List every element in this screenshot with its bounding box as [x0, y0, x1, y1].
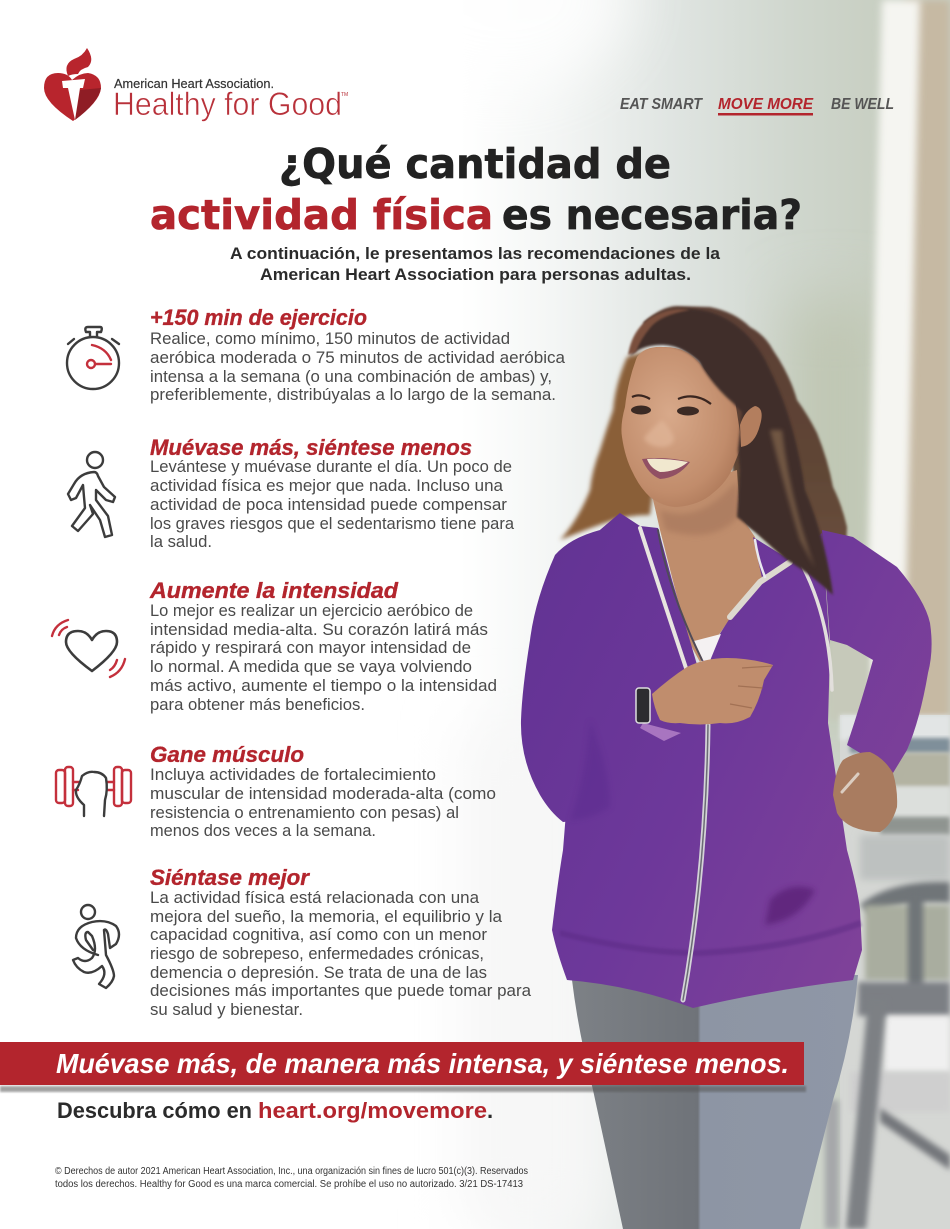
neck and chest [652, 470, 764, 662]
body text: mejora del sueño, la memoria, el equilibrio y la [150, 908, 503, 926]
body text: más activo, aumente el tiempo o la intensidad [150, 677, 497, 695]
body text: Incluya actividades de fortalecimiento [150, 766, 436, 784]
fitness tracker [636, 688, 650, 723]
hoodie hem shading [560, 920, 862, 956]
woman jogging [521, 306, 932, 1229]
copyright: todos los derechos. Healthy for Good es una marca comercial. Se prohíbe el uso no autorizado. 3/21 DS-17413 [55, 1179, 523, 1190]
neck shadow [660, 480, 740, 535]
call to action [57, 1098, 493, 1123]
body text [150, 889, 532, 1019]
body text: Levántese y muévase durante el día. Un poco de [150, 458, 512, 476]
title [150, 140, 802, 239]
banner: Muévase más, de manera más intensa, y siéntese menos. [56, 1048, 789, 1079]
copyright: © Derechos de autor 2021 American Heart Association, Inc., una organización sin fines de lucro 501(c)(3). Reservados [55, 1166, 528, 1177]
left hand finger lines [730, 666, 772, 708]
body text: los graves riesgos que el sedentarismo tiene para [150, 515, 515, 533]
ear [740, 406, 762, 447]
hair back, orange-brown left side [560, 350, 660, 540]
body text [150, 330, 566, 404]
body text: decisiones más importantes que puede tomar para [150, 982, 532, 1000]
call to action: Descubra cómo en [57, 1098, 252, 1123]
icon: hand with dumbbell [56, 767, 131, 816]
copyright [55, 1166, 528, 1190]
heading: Aumente la intensidad [149, 578, 399, 603]
body text [150, 766, 496, 840]
call to action: . [487, 1098, 493, 1123]
subtitle [230, 245, 721, 284]
body text: actividad física es mejor que nada. Incluso una [150, 477, 504, 495]
logo: American Heart Association Healthy for Good: Healthy for Good [113, 86, 342, 122]
panel: build muscle [56, 742, 496, 840]
body text [150, 458, 515, 551]
hoodie left sleeve [521, 513, 665, 822]
icon: walking person [68, 452, 115, 537]
hoodie right sleeve [822, 530, 932, 773]
body text: rápido y respirará con mayor intensidad de [150, 639, 471, 657]
navigation [620, 96, 894, 116]
panel: increase intensity [52, 578, 497, 714]
body text: La actividad física está relacionada con una [150, 889, 480, 907]
navigation: EAT SMART [620, 96, 703, 113]
left hand [652, 658, 773, 724]
wordmark: American Heart Association. [114, 76, 274, 91]
wristband [640, 723, 681, 741]
hair lighter streaks [770, 430, 815, 568]
subtitle: American Heart Association para personas adultas. [260, 266, 691, 284]
body text: intensa a la semana (o una combinación de ambas) y, [150, 368, 552, 386]
banner [0, 1042, 806, 1092]
title: ¿Qué cantidad de [279, 140, 671, 188]
body text: para obtener más beneficios. [150, 696, 365, 714]
body text: resistencia o entrenamiento con pesas) al [150, 804, 459, 822]
hair back, right side [643, 306, 847, 600]
body text: riesgo de sobrepeso, enfermedades crónicas, [150, 945, 484, 963]
icon: beating heart [52, 620, 125, 677]
leggings [572, 975, 858, 1229]
icon: stopwatch [67, 327, 119, 389]
title: es necesaria? [502, 191, 802, 239]
white shirt [694, 634, 721, 668]
body text: capacidad cognitiva, así como con un menor [150, 926, 488, 944]
logo: American Heart Association Healthy for Good: TM [341, 92, 348, 98]
heading: Gane músculo [150, 742, 304, 767]
navigation: BE WELL [831, 96, 894, 113]
body text: demencia o depresión. Se trata de una de las [150, 964, 487, 982]
body text: su salud y bienestar. [150, 1001, 303, 1019]
right hand [833, 752, 897, 832]
body text: lo normal. A medida que se vaya volviendo [150, 658, 472, 676]
hoodie pocket shading [765, 887, 815, 925]
icon: running person [73, 905, 119, 988]
logo: American Heart Association Healthy for Good [44, 48, 348, 122]
right hand highlight [842, 774, 858, 792]
panel: move more sit less [68, 435, 515, 551]
call to action: heart.org/movemore [258, 1098, 487, 1123]
body text: la salud. [150, 533, 212, 551]
body text: muscular de intensidad moderada-alta (como [150, 785, 496, 803]
face features [631, 395, 711, 479]
heading: +150 min de ejercicio [150, 305, 367, 330]
body text [150, 602, 497, 714]
heading: Muévase más, siéntese menos [150, 435, 472, 460]
body text: intensidad media-alta. Su corazón latirá más [150, 621, 488, 639]
panel: 150 minutes [67, 305, 566, 404]
body text: Lo mejor es realizar un ejercicio aeróbico de [150, 602, 473, 620]
navigation: MOVE MORE [718, 96, 814, 113]
icon: heart and torch [44, 48, 101, 121]
body text: menos dos veces a la semana. [150, 822, 376, 840]
body text: preferiblemente, distribúyalas a lo largo de la semana. [150, 386, 556, 404]
title: actividad física [150, 191, 493, 239]
hair reddish front strands [628, 309, 690, 355]
heading: Siéntase mejor [150, 865, 310, 890]
face [621, 347, 742, 507]
body text: aeróbica moderada o 75 minutos de actividad aeróbica [150, 349, 566, 367]
hoodie sleeve shading [570, 720, 610, 820]
body text: actividad de poca intensidad puede compensar [150, 496, 508, 514]
panel: feel better [73, 865, 532, 1019]
hair top and right dark strands [630, 309, 833, 595]
collar and drawstrings [640, 528, 832, 1000]
hoodie body [552, 513, 862, 1008]
subtitle: A continuación, le presentamos las recomendaciones de la [230, 245, 721, 263]
body text: Realice, como mínimo, 150 minutos de actividad [150, 330, 510, 348]
